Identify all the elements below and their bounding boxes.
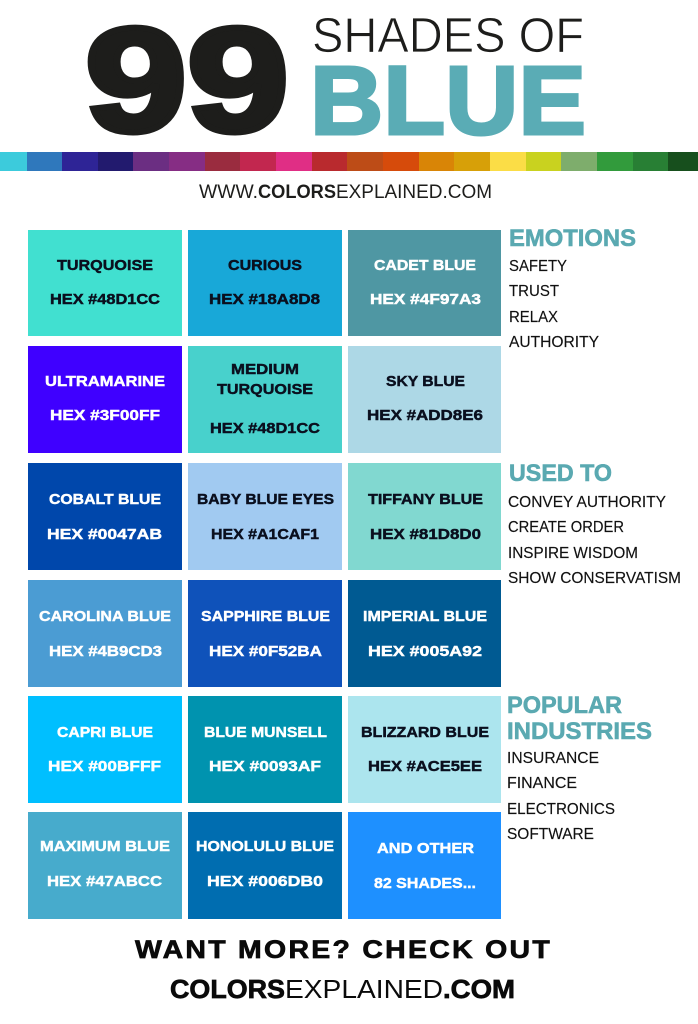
list: used to: CREATE ORDER bbox=[508, 519, 624, 536]
website url: COLORS bbox=[258, 182, 336, 203]
panel: used to bbox=[508, 460, 681, 587]
swatch: cobalt blue: HEX #0047AB bbox=[47, 526, 162, 543]
list: popular industries: FINANCE bbox=[507, 775, 577, 792]
footer line: website: .COM bbox=[443, 974, 515, 1004]
list: popular industries: SOFTWARE bbox=[507, 826, 594, 843]
swatch: imperial blue bbox=[348, 580, 501, 687]
footer line: website bbox=[170, 974, 515, 1004]
swatch: sky blue: HEX #ADD8E6 bbox=[367, 407, 483, 424]
list: popular industries: ELECTRONICS bbox=[507, 801, 615, 818]
website url bbox=[199, 182, 492, 203]
swatch: cadet blue: HEX #4F97A3 bbox=[370, 291, 481, 308]
swatch: ultramarine bbox=[28, 346, 182, 453]
footer line: want more: WANT MORE? CHECK OUT bbox=[135, 936, 552, 964]
heading: emotions: EMOTIONS bbox=[509, 225, 636, 252]
swatch: medium turquoise: MEDIUM bbox=[231, 361, 299, 378]
swatch: sky blue bbox=[348, 346, 501, 453]
panel: popular industries bbox=[507, 692, 652, 843]
swatch: blue munsell: HEX #0093AF bbox=[209, 758, 321, 775]
swatch: ultramarine: ULTRAMARINE bbox=[45, 373, 165, 390]
swatch: turquoise bbox=[28, 230, 182, 336]
swatch: sapphire blue bbox=[188, 580, 342, 687]
swatch: blizzard blue: BLIZZARD BLUE bbox=[361, 724, 489, 741]
swatch: turquoise: HEX #48D1CC bbox=[50, 291, 160, 308]
swatch: honolulu blue: HEX #006DB0 bbox=[207, 873, 323, 890]
heading: popular industries: POPULAR bbox=[507, 692, 622, 719]
swatch: honolulu blue: HONOLULU BLUE bbox=[196, 838, 334, 855]
swatch: and other 82 shades bbox=[348, 812, 501, 919]
swatch: cobalt blue: COBALT BLUE bbox=[49, 491, 161, 508]
heading: used to: USED TO bbox=[509, 460, 612, 487]
swatch: curious: CURIOUS bbox=[228, 257, 302, 274]
swatch: baby blue eyes bbox=[188, 463, 342, 570]
list: emotions: TRUST bbox=[509, 283, 559, 300]
list: popular industries bbox=[507, 750, 615, 843]
swatch: capri blue: HEX #00BFFF bbox=[48, 758, 161, 775]
swatch: blue munsell: BLUE MUNSELL bbox=[204, 724, 327, 741]
list: used to bbox=[508, 494, 681, 587]
title line: shades of: SHADES OF bbox=[312, 9, 584, 63]
swatch: medium turquoise: TURQUOISE bbox=[217, 381, 313, 398]
swatch: cobalt blue bbox=[28, 463, 182, 570]
list: used to: CONVEY AUTHORITY bbox=[508, 494, 666, 511]
footer call to action bbox=[135, 936, 552, 1004]
swatch: medium turquoise bbox=[188, 346, 342, 453]
swatch: carolina blue bbox=[28, 580, 182, 687]
list: used to: INSPIRE WISDOM bbox=[508, 545, 638, 562]
list: used to: SHOW CONSERVATISM bbox=[508, 570, 681, 587]
swatch: capri blue: CAPRI BLUE bbox=[57, 724, 153, 741]
list: emotions bbox=[509, 258, 599, 351]
swatch: blizzard blue bbox=[348, 696, 501, 803]
swatch: medium turquoise: HEX #48D1CC bbox=[210, 420, 320, 437]
rainbow colour bar bbox=[0, 152, 698, 171]
swatch: cadet blue bbox=[348, 230, 501, 336]
swatch: maximum blue: MAXIMUM BLUE bbox=[40, 838, 170, 855]
footer line: website: COLORS bbox=[170, 974, 285, 1004]
swatch: turquoise: TURQUOISE bbox=[57, 257, 153, 274]
swatch: carolina blue: CAROLINA BLUE bbox=[39, 608, 171, 625]
swatch: tiffany blue: TIFFANY BLUE bbox=[368, 491, 483, 508]
swatch: baby blue eyes: BABY BLUE EYES bbox=[197, 491, 334, 508]
swatch: blue munsell bbox=[188, 696, 342, 803]
heading: popular industries bbox=[507, 692, 652, 745]
website url: WWW. bbox=[199, 182, 258, 203]
title bbox=[85, 0, 586, 163]
website url: EXPLAINED.COM bbox=[336, 182, 492, 203]
swatch: blizzard blue: HEX #ACE5EE bbox=[368, 758, 482, 775]
swatch: maximum blue: HEX #47ABCC bbox=[47, 873, 162, 890]
list: emotions: SAFETY bbox=[509, 258, 567, 275]
swatch: and other 82 shades: AND OTHER bbox=[377, 840, 474, 857]
list: emotions: AUTHORITY bbox=[509, 334, 599, 351]
swatch: cadet blue: CADET BLUE bbox=[374, 257, 476, 274]
swatch: and other 82 shades: 82 SHADES... bbox=[374, 875, 476, 892]
swatch: baby blue eyes: HEX #A1CAF1 bbox=[211, 526, 319, 543]
heading: popular industries: INDUSTRIES bbox=[507, 718, 652, 745]
list: emotions: RELAX bbox=[509, 309, 558, 326]
swatch: carolina blue: HEX #4B9CD3 bbox=[49, 643, 162, 660]
swatch: sky blue: SKY BLUE bbox=[386, 373, 465, 390]
list: popular industries: INSURANCE bbox=[507, 750, 599, 767]
swatch: curious bbox=[188, 230, 342, 336]
swatch: sapphire blue: SAPPHIRE BLUE bbox=[201, 608, 330, 625]
title word: blue: BLUE bbox=[310, 46, 586, 155]
footer line: website: EXPLAINED bbox=[285, 974, 443, 1004]
panel: colour swatches bbox=[28, 230, 501, 919]
swatch: imperial blue: HEX #005A92 bbox=[368, 643, 482, 660]
swatch: imperial blue: IMPERIAL BLUE bbox=[363, 608, 487, 625]
swatch: tiffany blue bbox=[348, 463, 501, 570]
title number 99: 99 bbox=[85, 0, 289, 163]
swatch: capri blue bbox=[28, 696, 182, 803]
swatch: honolulu blue bbox=[188, 812, 342, 919]
swatch: curious: HEX #18A8D8 bbox=[209, 291, 320, 308]
panel: emotions bbox=[509, 225, 636, 351]
swatch: ultramarine: HEX #3F00FF bbox=[50, 407, 160, 424]
swatch: sapphire blue: HEX #0F52BA bbox=[209, 643, 322, 660]
swatch: tiffany blue: HEX #81D8D0 bbox=[370, 526, 481, 543]
swatch: maximum blue bbox=[28, 812, 182, 919]
